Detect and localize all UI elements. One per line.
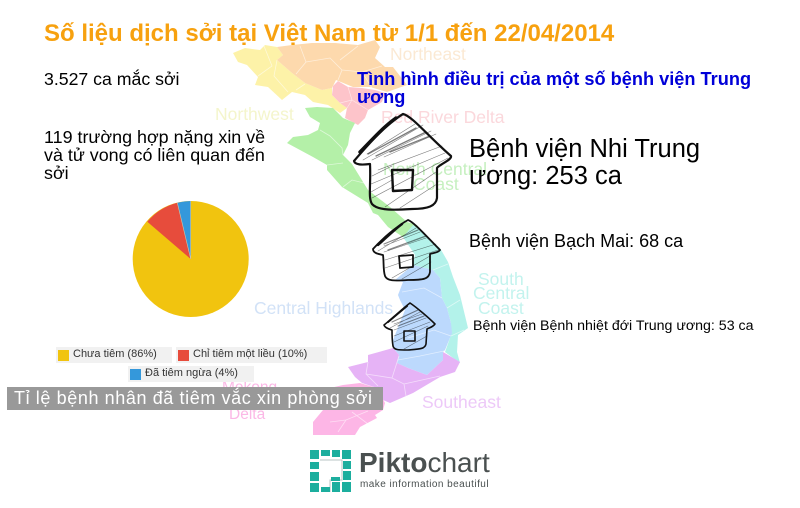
- region: Northwest: [215, 45, 347, 124]
- stat: severe cases and deaths: [44, 127, 265, 183]
- icon: large house, Bệnh viện Nhi Trung ương: [354, 114, 451, 210]
- heading: hospital treatment: Tình hình điều trị của một số bệnh viện Trung: [357, 69, 751, 89]
- region: South Central Coast: Central: [473, 283, 529, 303]
- region: Mekong Delta: Mekong: [222, 379, 277, 396]
- region: Central Highlands: [254, 265, 452, 375]
- legend: pie chart: [56, 347, 327, 382]
- legend item: vaccinated: Đã tiêm ngừa (4%): [145, 367, 238, 379]
- heading: hospital treatment: ương: [357, 87, 405, 107]
- region: Red River Delta: [332, 81, 505, 127]
- hospital label: Bệnh nhiệt đới Trung ương: Bệnh viện Bệnh nhiệt đới Trung ương: 53 ca: [473, 318, 754, 334]
- hospital label: Nhi Trung ương: [469, 135, 700, 190]
- region: Southeast: Southeast: [422, 392, 501, 412]
- legend item: vaccinated: [128, 366, 254, 382]
- stat: severe cases and deaths: và tử vong có liên quan đến: [44, 145, 265, 165]
- legend item: not vaccinated: Chưa tiêm (86%): [73, 348, 157, 360]
- region: Central Highlands: Central Highlands: [254, 298, 393, 318]
- icon: small house, Bệnh viện Bệnh nhiệt đới Trung ương: [384, 303, 435, 350]
- logo wordmark: Piktochart: make information beautiful: [360, 479, 489, 490]
- region: South Central Coast: [403, 225, 529, 363]
- region: Northeast: [277, 40, 466, 92]
- region: Northwest: Northwest: [215, 104, 294, 124]
- region: Mekong Delta: [222, 379, 385, 435]
- region: North Central Coast: [287, 107, 487, 237]
- title: Số liệu dịch sởi tại Việt Nam từ 1/1 đến 22/04/2014: [44, 20, 614, 47]
- stat: severe cases and deaths: sởi: [44, 163, 69, 183]
- logo icon: Piktochart: [310, 450, 351, 492]
- region: Southeast: [348, 348, 501, 412]
- region: South Central Coast: South: [478, 269, 524, 289]
- hospital label: Nhi Trung ương: Bệnh viện Nhi Trung: [469, 135, 700, 163]
- stat: total cases: 3.527 ca mắc sởi: [44, 69, 179, 89]
- region: Red River Delta: Red River Delta: [381, 107, 505, 127]
- icon: medium house, Bệnh viện Bạch Mai: [373, 220, 440, 281]
- stat: severe cases and deaths: 119 trường hợp nặng xin về: [44, 127, 265, 147]
- region: North Central Coast: North Central: [383, 159, 487, 179]
- legend item: not vaccinated: [56, 347, 172, 363]
- legend item: one dose: Chỉ tiêm một liều (10%): [193, 348, 307, 360]
- heading: hospital treatment: [357, 69, 751, 107]
- logo wordmark: Piktochart: Piktochart: [359, 447, 490, 478]
- hospital label: Nhi Trung ương: ương: 253 ca: [469, 162, 622, 190]
- legend item: one dose: [176, 347, 327, 363]
- region: South Central Coast: Coast: [478, 298, 524, 318]
- region: Northeast: Northeast: [390, 44, 466, 64]
- pie chart: vaccination rate: [133, 201, 249, 317]
- region: Mekong Delta: Delta: [229, 406, 266, 423]
- map of Vietnam by region: [215, 40, 529, 435]
- caption: vaccination rate: Tỉ lệ bệnh nhân đã tiêm vắc xin phòng sởi: [14, 388, 373, 408]
- hospital label: Bạch Mai: Bệnh viện Bạch Mai: 68 ca: [469, 231, 683, 251]
- region: North Central Coast: Coast: [413, 174, 459, 194]
